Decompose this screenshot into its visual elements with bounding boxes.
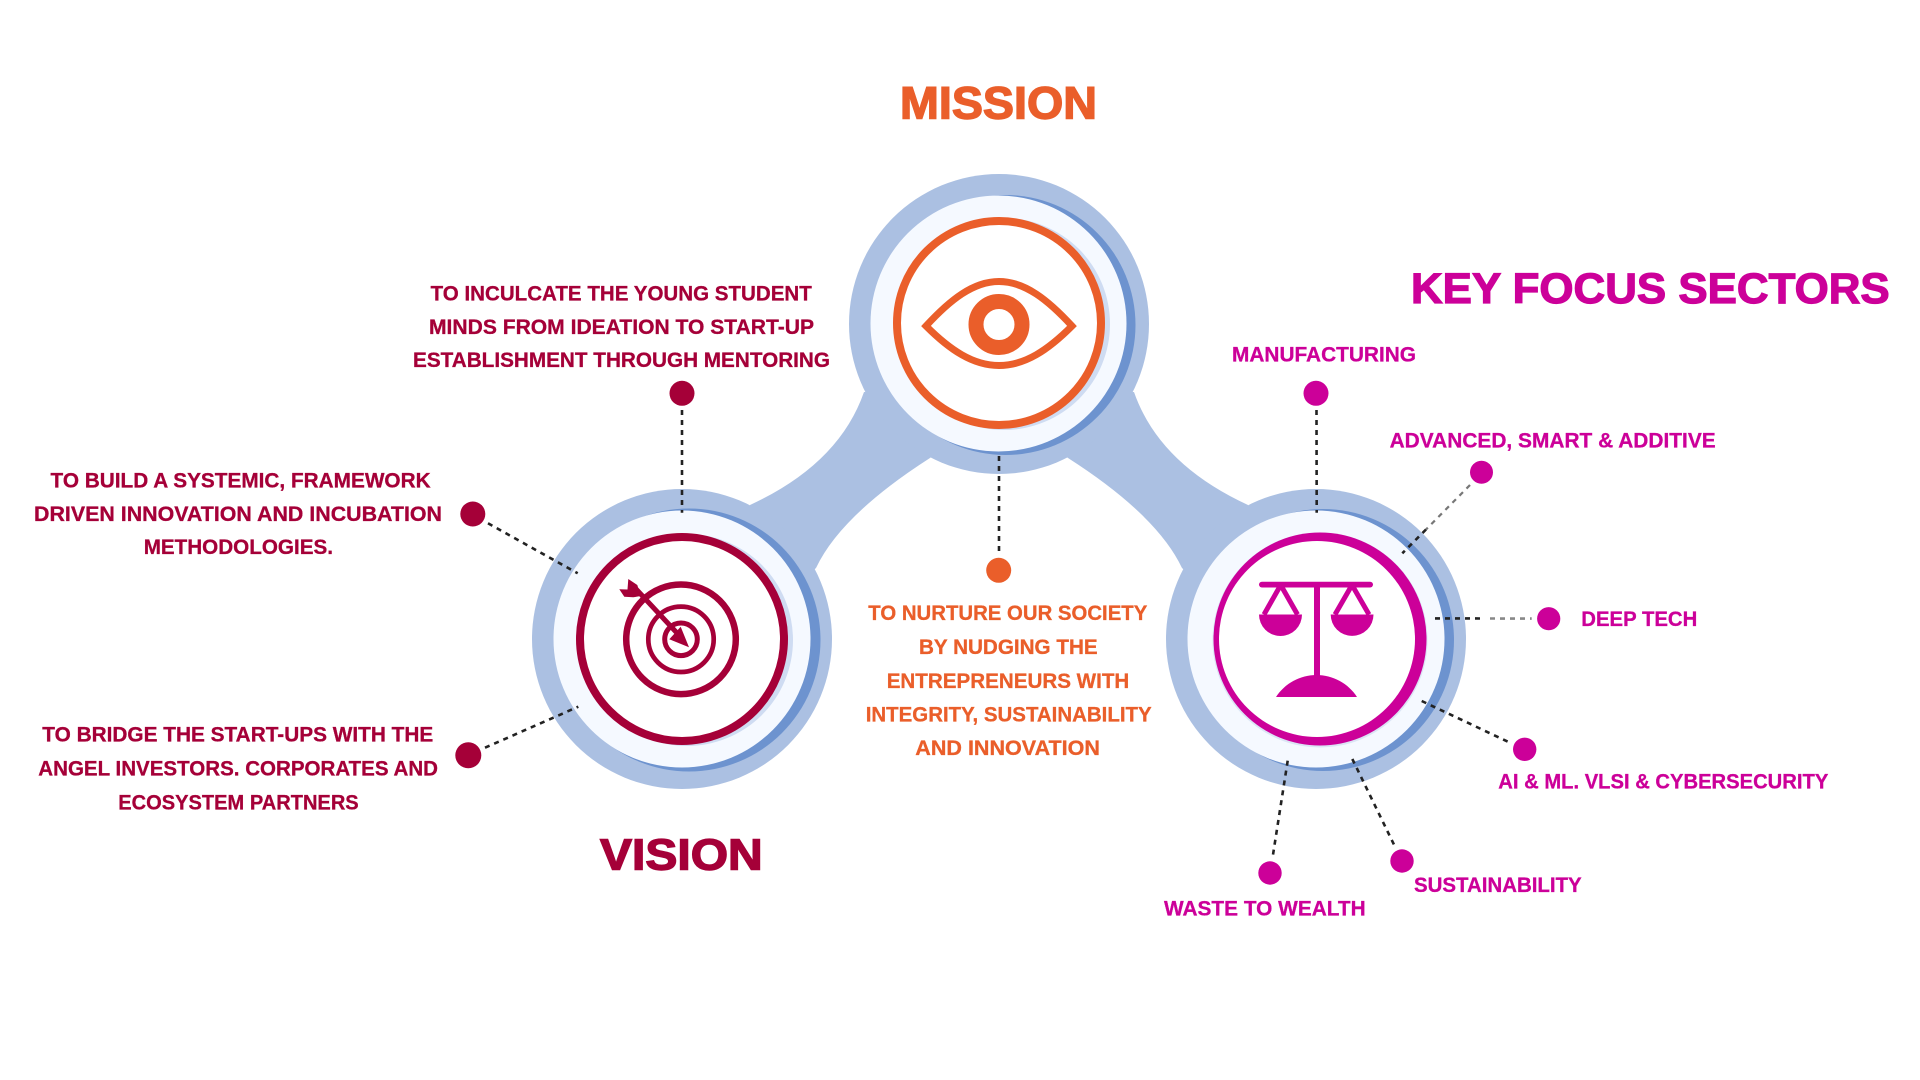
text block: mission statement: BY NUDGING THE [919,636,1098,659]
text block: mission statement [866,602,1152,760]
label: ai, ml, vlsi and cybersecurity: AI & ML. VLSI & CYBERSECURITY [1498,770,1828,793]
icon: balance scale [1259,582,1374,697]
label: advanced, smart and additive: ADVANCED, SMART & ADDITIVE [1390,430,1716,452]
panel: vision medallion [554,508,820,772]
text block: vision point three: TO BRIDGE THE START-UPS WITH THE [42,723,433,746]
heading: key focus sectors: KEY FOCUS SECTORS [1411,266,1890,313]
text block: vision point one: MINDS FROM IDEATION TO START-UP [429,316,814,339]
text block: mission statement: INTEGRITY, SUSTAINABILITY [866,704,1152,727]
icon: target with arrow [619,579,736,694]
heading: vision: VISION [600,830,763,880]
label: deep tech: DEEP TECH [1581,608,1697,631]
text block: vision point one: TO INCULCATE THE YOUNG STUDENT [431,282,812,306]
vision dots [455,381,694,768]
text block: vision point one [413,282,830,372]
icon: eye [926,282,1072,366]
text block: vision point three: ANGEL INVESTORS. CORPORATES AND [38,757,438,780]
mission dot [986,558,1011,583]
panel: key focus sectors medallion [1188,509,1454,771]
label: sustainability: SUSTAINABILITY [1414,874,1582,897]
text block: vision point two [34,469,442,559]
label: manufacturing: MANUFACTURING [1232,344,1416,366]
text block: mission statement: ENTREPRENEURS WITH [887,670,1129,693]
connected blue hub shape [532,174,1466,789]
sector dots [1258,381,1560,885]
text block: vision point one: ESTABLISHMENT THROUGH MENTORING [413,349,830,372]
dotted connector lines [485,410,1532,857]
text block: mission statement: TO NURTURE OUR SOCIETY [868,602,1147,625]
text block: vision point two: TO BUILD A SYSTEMIC, FRAMEWORK [50,469,431,492]
text block: vision point two: DRIVEN INNOVATION AND INCUBATION [34,503,442,526]
text block: vision point three: ECOSYSTEM PARTNERS [118,791,359,814]
label: waste to wealth: WASTE TO WEALTH [1164,898,1366,920]
text block: vision point two: METHODOLOGIES. [144,536,333,559]
heading: mission: MISSION [900,78,1097,128]
panel: mission medallion [870,195,1136,455]
text block: vision point three [38,723,438,814]
text block: mission statement: AND INNOVATION [915,737,1100,760]
